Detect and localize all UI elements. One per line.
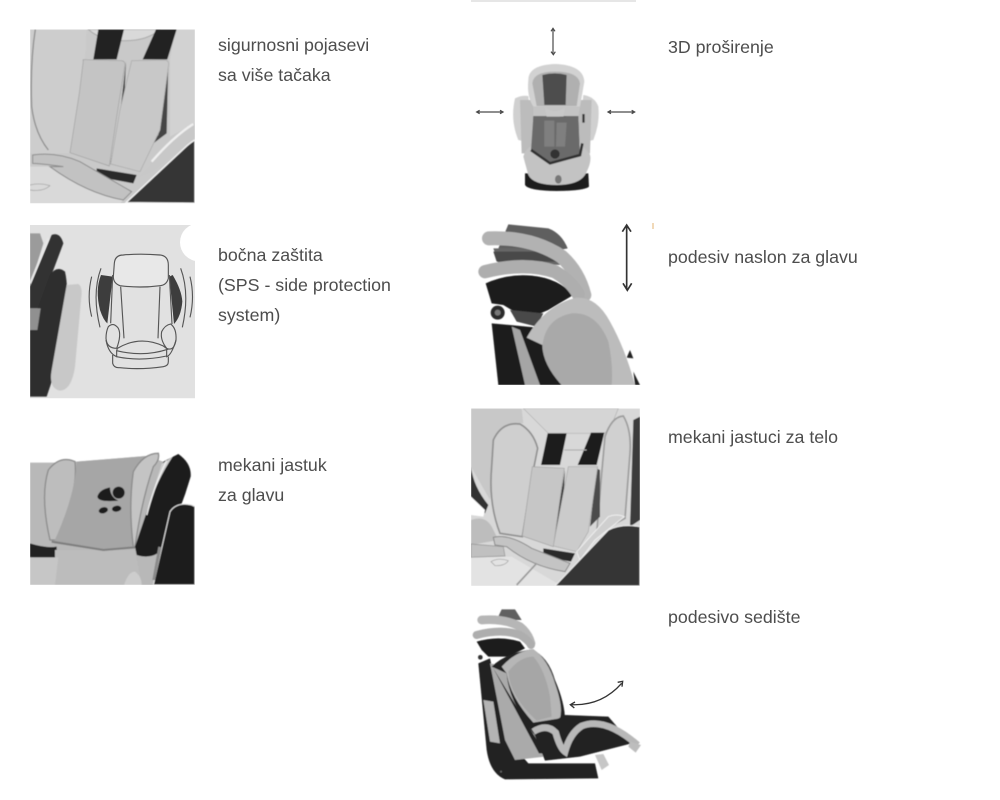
arrow: right <box>608 110 635 114</box>
seat base <box>30 167 130 203</box>
text: soft body pads: mekani jastuci za telo <box>668 427 838 447</box>
diagram: side protection system <box>30 225 195 398</box>
arrow: seat recline <box>570 681 623 708</box>
chest strap left <box>93 29 124 59</box>
wing <box>135 454 191 557</box>
text: multi-point harness: sigurnosni pojasevi <box>218 35 369 55</box>
text: multi-point harness <box>218 35 369 85</box>
headrest panel <box>53 456 147 551</box>
text: side protection: system) <box>218 305 280 325</box>
text: soft head cushion: za glavu <box>218 485 284 505</box>
text: adjustable seat: podesivo sedište <box>668 607 800 627</box>
text: soft head cushion <box>218 455 327 505</box>
text: side protection: bočna zaštita <box>218 245 323 265</box>
text: 3D expansion: 3D proširenje <box>668 37 774 57</box>
arrow: height adjust <box>622 225 632 290</box>
photo: adjustable headrest side view <box>485 224 640 385</box>
right body pad <box>597 416 630 533</box>
text: side protection: (SPS - side protection <box>218 275 391 295</box>
text: multi-point harness: sa više tačaka <box>218 65 331 85</box>
chest strap right <box>143 29 177 59</box>
text: adjustable headrest: podesiv naslon za glavu <box>668 247 858 267</box>
arrow: left <box>477 110 503 114</box>
brand logo <box>97 487 125 514</box>
seat outline <box>89 254 192 369</box>
photo: adjustable seat side view <box>477 609 641 779</box>
pad panels <box>522 467 564 547</box>
photo: soft head cushion <box>30 453 195 585</box>
illustrations <box>30 0 654 780</box>
text: soft head cushion: mekani jastuk <box>218 455 327 475</box>
photo: 3D expansion with arrows <box>477 28 635 191</box>
photo: multi-point harness <box>30 29 195 203</box>
text: side protection <box>218 245 391 325</box>
arrow: up-down <box>551 28 555 55</box>
fleck: orange mark <box>652 223 654 229</box>
chest pad right <box>111 60 169 172</box>
side wing <box>126 140 195 203</box>
left body pad <box>491 424 538 537</box>
strip: cropped top image edge <box>471 0 636 2</box>
chest pad left <box>70 60 125 166</box>
photo: soft body pads <box>471 408 640 586</box>
